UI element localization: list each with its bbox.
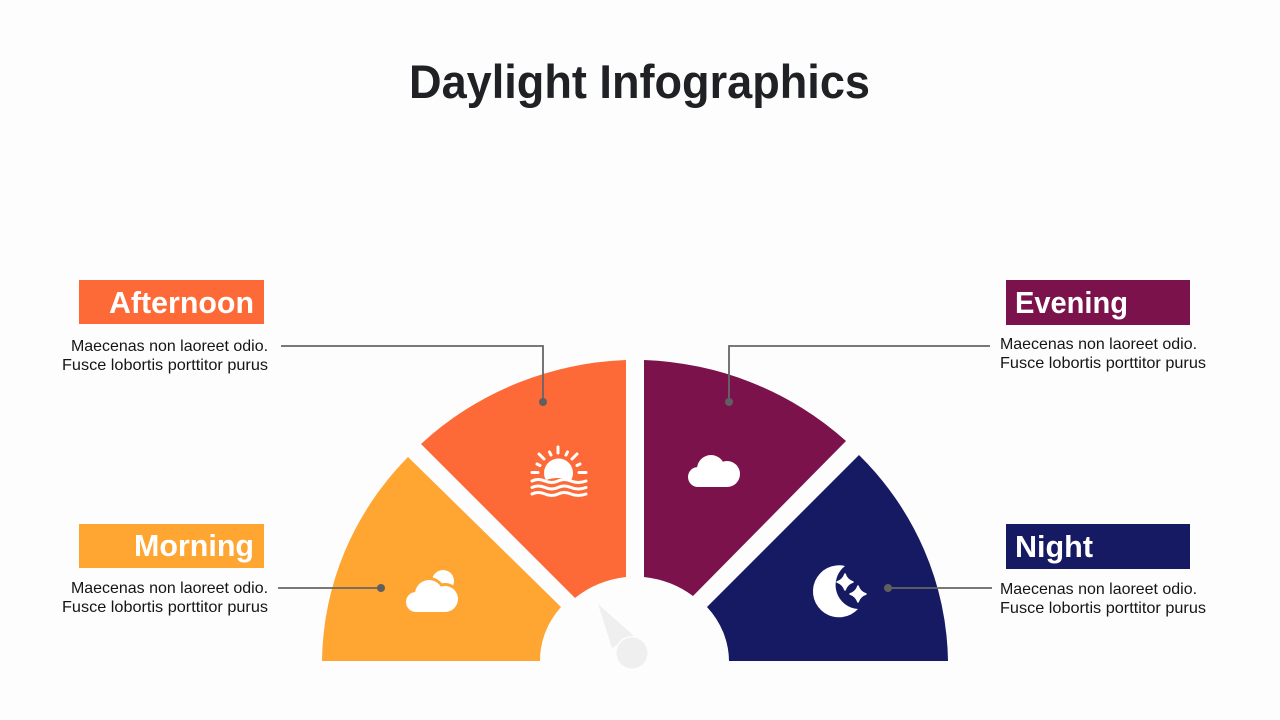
icon: cloud [688, 455, 740, 487]
label: night [1006, 524, 1190, 569]
title: Daylight Infographics [409, 55, 870, 108]
text: morning description: Maecenas non laoreet odio. [71, 580, 268, 597]
label: evening [1006, 280, 1190, 325]
segment: afternoon [421, 360, 626, 598]
icon: sun and cloud [406, 570, 461, 615]
text: evening description: Maecenas non laoreet odio. [1000, 336, 1197, 353]
text: afternoon description: Maecenas non laoreet odio. [71, 338, 268, 355]
gauge chart [322, 360, 948, 661]
text: night description [1000, 581, 1206, 617]
text: afternoon description: Fusce lobortis porttitor purus [62, 357, 268, 374]
segment: evening [644, 360, 846, 596]
icon: sunset over water [532, 447, 586, 496]
label: morning: Morning [134, 528, 254, 563]
text: morning description: Fusce lobortis porttitor purus [62, 599, 268, 616]
label: afternoon: Afternoon [109, 285, 254, 320]
text: evening description [1000, 336, 1206, 372]
gauge needle [598, 604, 649, 670]
connector: morning [278, 584, 385, 592]
connector: night [884, 584, 992, 592]
segment: night [707, 455, 948, 661]
connector: afternoon [281, 346, 547, 406]
text: evening description: Fusce lobortis porttitor purus [1000, 355, 1206, 372]
text: afternoon description [62, 338, 268, 374]
label: morning [79, 524, 264, 568]
connector: evening [725, 346, 990, 406]
label: evening: Evening [1015, 285, 1128, 320]
label: night: Night [1015, 529, 1093, 564]
text: morning description [62, 580, 268, 616]
label: afternoon [79, 280, 264, 324]
segment: morning [322, 457, 561, 661]
icon: moon and stars [813, 565, 866, 617]
text: night description: Fusce lobortis porttitor purus [1000, 600, 1206, 617]
text: night description: Maecenas non laoreet odio. [1000, 581, 1197, 598]
